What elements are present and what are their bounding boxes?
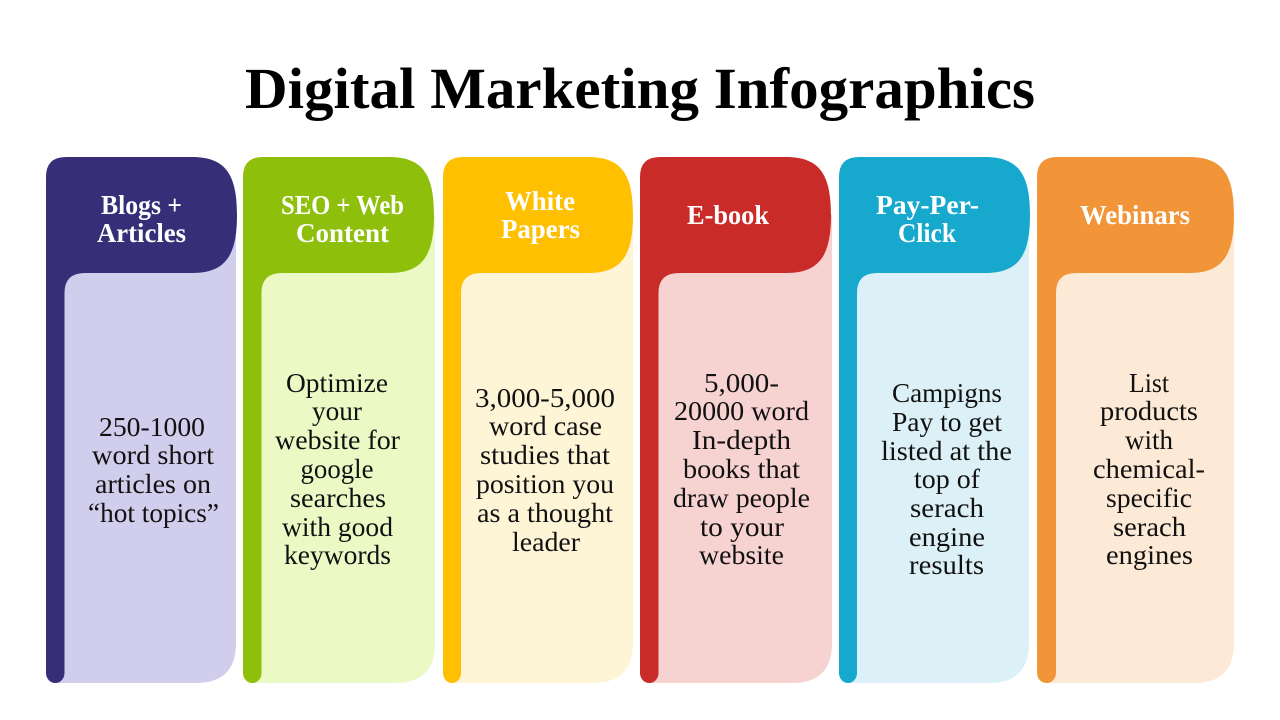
header tab and side strip bbox=[839, 157, 1030, 683]
description: Optimize bbox=[286, 368, 388, 398]
description: your bbox=[312, 396, 362, 426]
description: top of bbox=[914, 464, 980, 494]
description: studies that bbox=[480, 440, 611, 470]
panel body bbox=[452, 215, 633, 683]
panel body bbox=[848, 215, 1029, 683]
description bbox=[673, 368, 810, 570]
heading: White bbox=[505, 186, 575, 216]
description: with bbox=[1125, 425, 1173, 455]
description: listed at the bbox=[881, 436, 1012, 466]
description: word case bbox=[489, 411, 602, 441]
description: website for bbox=[275, 425, 400, 455]
title: Digital Marketing Infographics bbox=[245, 56, 1035, 121]
heading bbox=[876, 190, 979, 248]
header tab and side strip bbox=[443, 157, 633, 683]
panel body bbox=[55, 215, 236, 683]
description bbox=[1093, 368, 1205, 570]
description: 5,000- bbox=[704, 368, 779, 398]
panel: Webinars bbox=[1037, 157, 1234, 683]
description: google bbox=[300, 454, 374, 484]
description: specific bbox=[1106, 483, 1192, 513]
description: engines bbox=[1106, 540, 1193, 570]
description: keywords bbox=[284, 540, 391, 570]
heading bbox=[501, 186, 580, 244]
description bbox=[88, 412, 219, 528]
description: serach bbox=[910, 493, 985, 523]
description: leader bbox=[512, 527, 580, 557]
description: results bbox=[909, 550, 984, 580]
description bbox=[475, 383, 615, 557]
description: articles on bbox=[95, 469, 212, 499]
description: with good bbox=[282, 512, 393, 542]
heading: Articles bbox=[97, 218, 186, 248]
heading: E-book bbox=[687, 200, 769, 230]
description: serach bbox=[1113, 512, 1187, 542]
description: “hot topics” bbox=[88, 498, 219, 528]
heading bbox=[97, 190, 186, 248]
description: position you bbox=[476, 469, 615, 499]
description: 250-1000 bbox=[99, 412, 205, 442]
description: draw people bbox=[673, 483, 810, 513]
panel body bbox=[252, 215, 435, 683]
panel: SEO + Web Content bbox=[243, 157, 435, 683]
description: In-depth bbox=[692, 425, 792, 455]
heading: Blogs + bbox=[101, 190, 182, 220]
heading: SEO + Web bbox=[281, 190, 404, 220]
description: chemical- bbox=[1093, 454, 1205, 484]
description: 3,000-5,000 bbox=[475, 383, 615, 413]
header tab and side strip bbox=[640, 157, 831, 683]
heading: Click bbox=[898, 218, 956, 248]
heading: Webinars bbox=[1080, 200, 1190, 230]
header tab and side strip bbox=[46, 157, 237, 683]
heading: Content bbox=[296, 218, 389, 248]
description: 20000 word bbox=[674, 396, 810, 426]
panel: Pay-Per-Click bbox=[839, 157, 1030, 683]
description: Campigns bbox=[892, 378, 1002, 408]
description: products bbox=[1100, 396, 1198, 426]
description: searches bbox=[290, 483, 386, 513]
panel body bbox=[1046, 215, 1234, 683]
description: website bbox=[699, 540, 784, 570]
description: word short bbox=[92, 440, 215, 470]
header tab and side strip bbox=[1037, 157, 1234, 683]
description: Pay to get bbox=[892, 407, 1002, 437]
panel body bbox=[649, 215, 832, 683]
panel: Blogs + Articles bbox=[46, 157, 237, 683]
description: engine bbox=[909, 522, 985, 552]
description bbox=[275, 368, 400, 570]
heading: Pay-Per- bbox=[876, 190, 979, 220]
panel: White Papers bbox=[443, 157, 633, 683]
description: books that bbox=[683, 454, 801, 484]
heading bbox=[281, 190, 404, 248]
description bbox=[881, 378, 1012, 580]
description: as a thought bbox=[477, 498, 614, 528]
description: List bbox=[1129, 368, 1169, 398]
heading: Papers bbox=[501, 214, 580, 244]
description: to your bbox=[700, 512, 784, 542]
panel: E-book bbox=[640, 157, 832, 683]
header tab and side strip bbox=[243, 157, 434, 683]
